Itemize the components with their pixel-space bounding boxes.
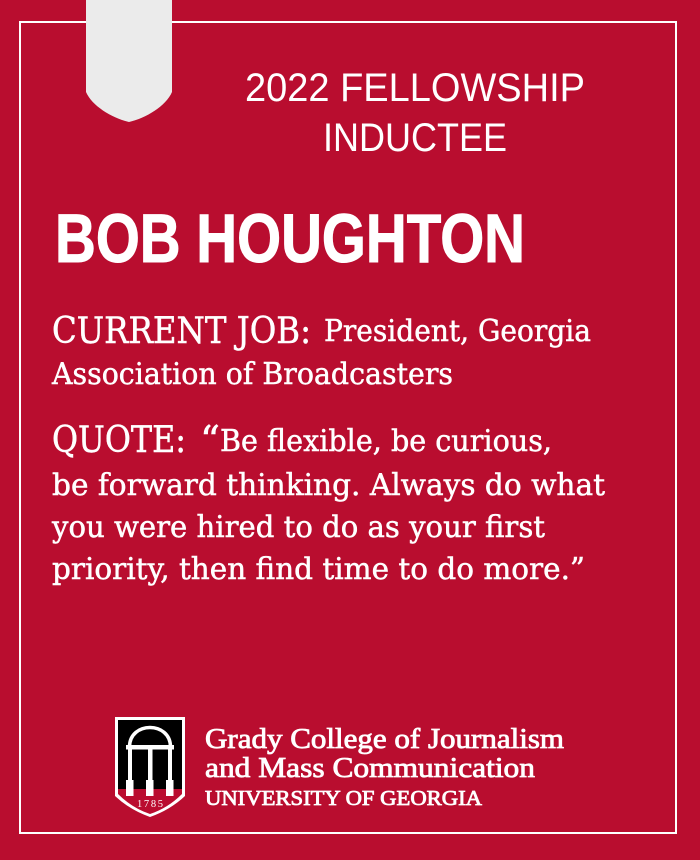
logo: UGA arch shield <box>115 717 185 817</box>
heading: fellowship inductee <box>245 66 585 160</box>
current job text <box>51 311 591 392</box>
current job text: Association of Broadcasters <box>51 357 453 392</box>
college name wordmark: and Mass Communication <box>205 753 535 784</box>
quote text: QUOTE: <box>52 420 186 461</box>
logo: UGA arch shield: 1785 <box>137 799 163 810</box>
quote text <box>51 418 605 587</box>
name: BOB HOUGHTON <box>55 200 525 277</box>
college name wordmark: Grady College of Journalism <box>205 724 564 755</box>
quote text: you were hired to do as your first <box>51 510 545 545</box>
current job text: President, Georgia <box>324 314 591 349</box>
college name wordmark <box>205 724 564 810</box>
heading: fellowship inductee: 2022 FELLOWSHIP <box>245 66 585 110</box>
heading: fellowship inductee: INDUCTEE <box>323 116 507 160</box>
current job text: CURRENT JOB: <box>52 311 311 352</box>
quote text: priority, then find time to do more.” <box>52 552 585 587</box>
college name wordmark: UNIVERSITY OF GEORGIA <box>205 786 483 810</box>
quote text: “ <box>200 418 220 462</box>
bookmark tab <box>86 0 172 122</box>
quote text: be forward thinking. Always do what <box>52 468 605 503</box>
quote text: Be flexible, be curious, <box>220 424 552 459</box>
